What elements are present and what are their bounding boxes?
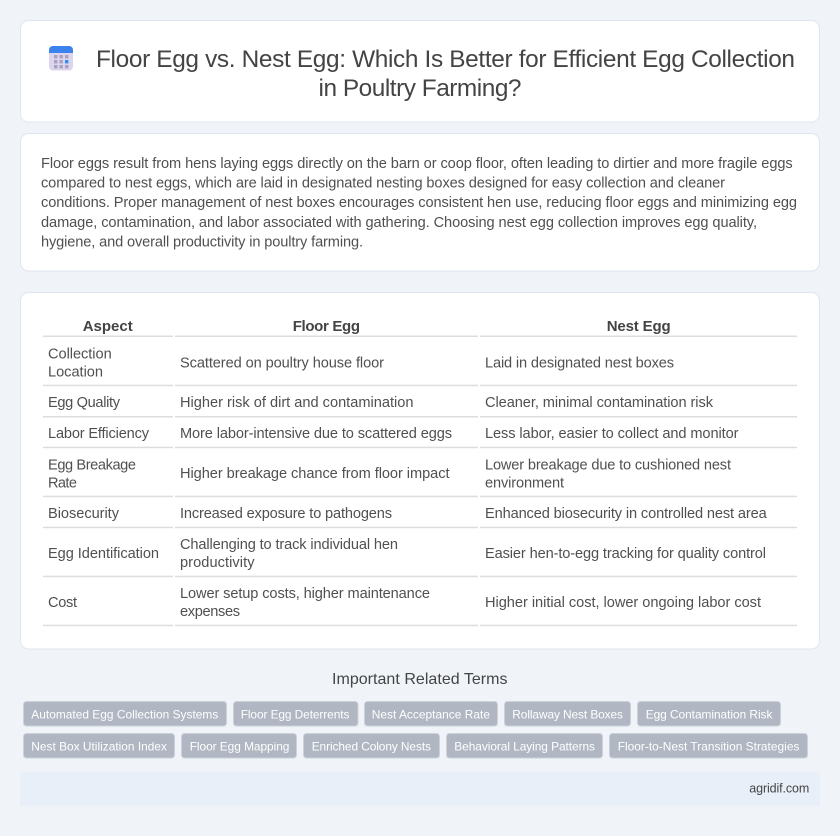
row: collection location: Scattered on poultry house floor — [180, 356, 384, 372]
row: egg quality — [48, 395, 714, 411]
panel: related term tags — [24, 702, 808, 758]
row: cost: Higher initial cost, lower ongoing labor cost — [485, 595, 761, 611]
row: egg breakage rate: Rate — [48, 475, 77, 491]
row: labor efficiency: More labor-intensive due to scattered eggs — [180, 426, 452, 442]
table header: Nest Egg — [607, 318, 671, 335]
row: biosecurity: Biosecurity — [48, 506, 120, 522]
row: collection location: Collection — [48, 347, 112, 363]
row: collection location: Location — [48, 365, 103, 381]
text block: description: conditions. Proper management of nest boxes encourages consistent hen use, reducing floor eggs and minimizing egg — [41, 195, 797, 211]
tag labels: Behavioral Laying Patterns — [454, 739, 595, 753]
row: biosecurity — [48, 506, 768, 522]
row: collection location: Laid in designated nest boxes — [485, 356, 674, 372]
row: egg breakage rate: Higher breakage chance from floor impact — [180, 466, 450, 482]
panel: comparison table — [20, 292, 820, 649]
table header: Aspect — [83, 318, 133, 335]
row: egg identification — [48, 537, 766, 571]
row: labor efficiency — [48, 426, 739, 442]
tag labels: Floor Egg Deterrents — [241, 707, 349, 721]
row: biosecurity: Increased exposure to pathogens — [180, 506, 392, 522]
row: egg breakage rate: Lower breakage due to cushioned nest — [485, 457, 731, 473]
row: egg identification: Easier hen-to-egg tracking for quality control — [485, 546, 766, 562]
row: labor efficiency: Less labor, easier to collect and monitor — [485, 426, 739, 442]
text block: description: compared to nest eggs, which are laid in designated nesting boxes designed for easy collection and cleaner — [41, 176, 725, 192]
row: cost: expenses — [180, 604, 240, 620]
row: egg quality: Cleaner, minimal contamination risk — [485, 395, 714, 411]
icon: calendar — [49, 46, 73, 70]
row: cost: Cost — [48, 595, 77, 611]
row: egg identification: productivity — [180, 555, 255, 571]
tag labels: Nest Acceptance Rate — [372, 707, 490, 721]
row: egg quality: Egg Quality — [48, 395, 121, 411]
footer — [20, 772, 820, 806]
row: egg identification: Challenging to track individual hen — [180, 537, 398, 553]
panel: title card — [20, 20, 820, 122]
tag labels: Floor Egg Mapping — [190, 739, 289, 753]
row: egg breakage rate — [48, 457, 731, 491]
tag labels: Egg Contamination Risk — [646, 707, 772, 721]
text block: description: Floor eggs result from hens laying eggs directly on the barn or coop floor, often leading to dirtier and more fragile eggs — [41, 156, 793, 172]
tag labels: Nest Box Utilization Index — [31, 739, 167, 753]
row: biosecurity: Enhanced biosecurity in controlled nest area — [485, 506, 768, 522]
table header — [83, 318, 671, 335]
panel: intro paragraph — [20, 134, 820, 271]
tag labels: Automated Egg Collection Systems — [31, 707, 218, 721]
table header: Floor Egg — [293, 318, 360, 335]
tag labels: Enriched Colony Nests — [312, 739, 431, 753]
row: egg breakage rate: Egg Breakage — [48, 457, 136, 473]
row: egg identification: Egg Identification — [48, 546, 159, 562]
row: cost: Lower setup costs, higher maintenance — [180, 586, 430, 602]
row: egg quality: Higher risk of dirt and contamination — [180, 395, 414, 411]
text block: description: damage, contamination, and labor associated with gathering. Choosing nest egg collection improves egg quality, — [41, 215, 757, 231]
title: in Poultry Farming? — [318, 75, 522, 102]
heading: important related terms: Important Related Terms — [332, 671, 508, 688]
tag labels: Rollaway Nest Boxes — [512, 707, 623, 721]
tag labels: Floor-to-Nest Transition Strategies — [618, 739, 799, 753]
text block: description — [41, 156, 797, 250]
title — [96, 46, 795, 102]
text block: description: hygiene, and overall productivity in poultry farming. — [41, 234, 363, 250]
footer: agridif.com — [749, 782, 809, 796]
tag labels — [31, 707, 799, 753]
row: labor efficiency: Labor Efficiency — [48, 426, 150, 442]
row: egg breakage rate: environment — [485, 475, 564, 491]
row: cost — [48, 586, 761, 620]
title: Floor Egg vs. Nest Egg: Which Is Better for Efficient Egg Collection — [96, 46, 795, 73]
row: collection location — [48, 347, 674, 381]
